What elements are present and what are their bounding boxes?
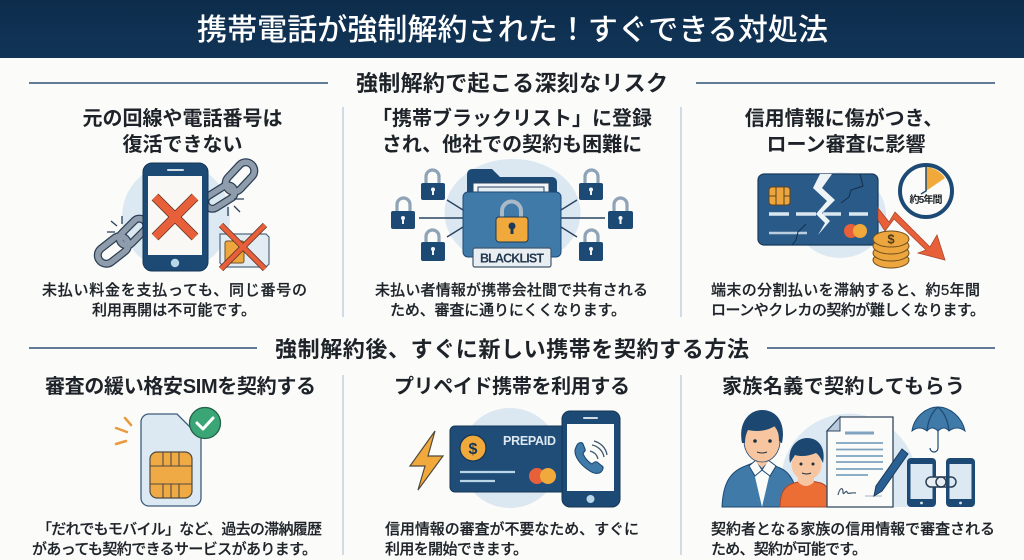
text: line cannot be restored: 未払い料金を支払っても、同じ番号の bbox=[42, 282, 307, 299]
text: budget SIM bbox=[32, 521, 322, 558]
title banner: 携帯電話が強制解約された！すぐできる対処法 bbox=[197, 14, 828, 47]
heading: credit damage: ローン審査に影響 bbox=[766, 133, 926, 156]
heading: line cannot be restored bbox=[82, 107, 282, 156]
icon: blacklist folder with locks: BLACKLIST bbox=[480, 252, 544, 266]
text: carrier blacklist: 未払い者情報が携帯会社間で共有される bbox=[375, 281, 648, 299]
panel: prepaid phone bbox=[385, 375, 639, 558]
text: credit damage bbox=[711, 282, 985, 319]
icon: family, contract, umbrella and linked phones bbox=[722, 407, 975, 507]
text: line cannot be restored: 利用再開は不可能です。 bbox=[92, 302, 256, 319]
text: prepaid phone: 利用を開始できます。 bbox=[385, 541, 528, 558]
icon: blacklist folder with locks bbox=[391, 159, 633, 267]
small locks bbox=[391, 170, 633, 261]
text: family contract bbox=[711, 521, 995, 558]
icon: cracked credit card, clock, coins and falling arrow: 約5年間 bbox=[910, 193, 942, 206]
heading: budget SIM: 審査の緩い格安SIMを契約する bbox=[45, 375, 316, 398]
title banner bbox=[0, 0, 1024, 58]
section heading: new contract methods: 強制解約後、すぐに新しい携帯を契約する方法 bbox=[275, 337, 749, 362]
icon: prepaid card, phone and lightning bolt: $ bbox=[469, 441, 478, 458]
heading: credit damage bbox=[745, 106, 943, 156]
text: family contract: ため、契約が可能です。 bbox=[711, 540, 867, 558]
icon: cracked credit card, clock, coins and falling arrow bbox=[758, 165, 952, 268]
adult bbox=[722, 410, 800, 507]
icon: prepaid card, phone and lightning bolt bbox=[410, 408, 620, 508]
heading: prepaid phone: プリペイド携帯を利用する bbox=[394, 375, 630, 398]
pen bbox=[874, 449, 908, 496]
text: carrier blacklist bbox=[375, 281, 648, 319]
panel: line cannot be restored bbox=[42, 107, 307, 319]
text: carrier blacklist: ため、審査に通りにくくなります。 bbox=[390, 302, 626, 319]
section heading: risks: 強制解約で起こる深刻なリスク bbox=[356, 71, 668, 96]
heading: credit damage: 信用情報に傷がつき、 bbox=[745, 106, 943, 130]
icon: cracked credit card, clock, coins and falling arrow: $ bbox=[887, 232, 895, 246]
icon: SIM card with check bbox=[116, 408, 220, 506]
heading: carrier blacklist: 「携帯ブラックリスト」に登録 bbox=[372, 106, 652, 130]
text: budget SIM: があっても契約できるサービスがあります。 bbox=[32, 540, 317, 558]
heading: carrier blacklist bbox=[372, 106, 652, 156]
icon: phone with broken chain and crossed SIM bbox=[94, 159, 269, 271]
panel: family contract bbox=[711, 375, 995, 558]
panel: credit damage bbox=[711, 106, 985, 319]
linked phones bbox=[907, 458, 975, 507]
heading: line cannot be restored: 復活できない bbox=[122, 133, 242, 156]
text: family contract: 契約者となる家族の信用情報で審査される bbox=[711, 521, 995, 538]
heading: family contract: 家族名義で契約してもらう bbox=[722, 375, 965, 398]
child bbox=[780, 438, 832, 507]
heading: line cannot be restored: 元の回線や電話番号は bbox=[82, 107, 282, 130]
umbrella bbox=[912, 407, 965, 452]
text: budget SIM: 「だれでもモバイル」など、過去の滞納履歴 bbox=[37, 521, 322, 538]
text: credit damage: 端末の分割払いを滞納すると、約5年間 bbox=[711, 282, 980, 299]
panel: carrier blacklist bbox=[372, 106, 652, 319]
panel: budget SIM bbox=[32, 375, 322, 558]
heading: carrier blacklist: され、他社での契約も困難に bbox=[382, 133, 642, 156]
text: prepaid phone bbox=[385, 520, 639, 558]
icon: prepaid card, phone and lightning bolt: PREPAID bbox=[503, 434, 556, 448]
text: credit damage: ローンやクレカの契約が難しくなります。 bbox=[711, 301, 985, 319]
text: prepaid phone: 信用情報の審査が不要なため、すぐに bbox=[385, 520, 639, 538]
contract document bbox=[827, 417, 893, 507]
text: line cannot be restored bbox=[42, 282, 307, 319]
